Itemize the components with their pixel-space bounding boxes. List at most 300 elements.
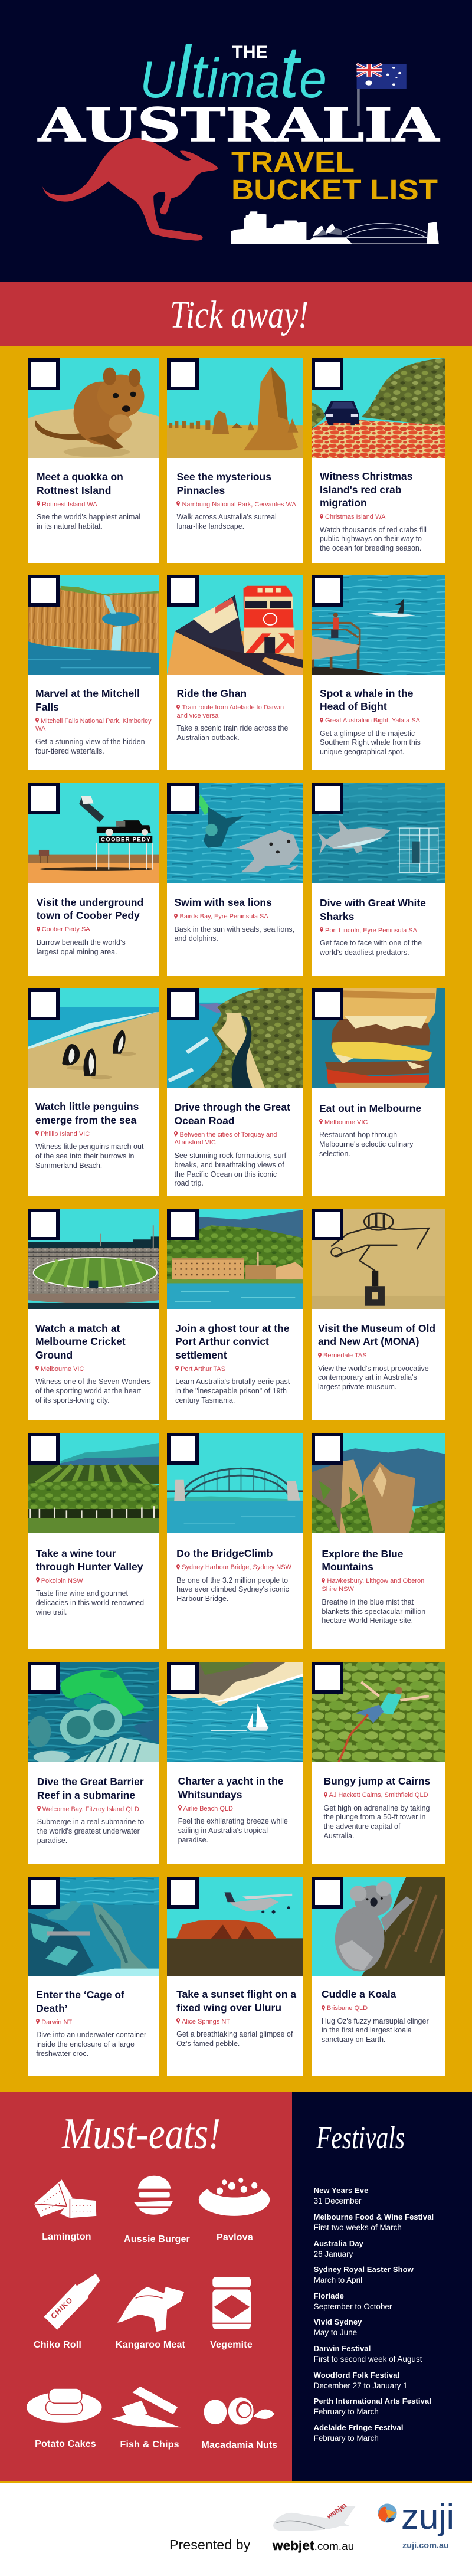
festival: darwin festival (314, 2343, 422, 2365)
festival: vivid sydney: May to June (314, 2328, 357, 2337)
text: the ghan: Train route from Adelaide to Darwin (182, 704, 284, 711)
text: red crab migration (320, 470, 427, 552)
heading: festivals: Festivals (316, 2120, 405, 2155)
label: lamington: Lamington (42, 2232, 91, 2242)
scene: ghan train (167, 575, 303, 675)
text: webjet url: webjet.com.au (273, 2538, 354, 2553)
text: great barrier reef: Submerge in a real submarine to (37, 1818, 144, 1826)
festival: perth international arts festival: Perth International Arts Festival (314, 2397, 431, 2405)
festival: vivid sydney: Vivid Sydney (314, 2318, 362, 2326)
text: cage of death (36, 1988, 146, 2059)
scene: submarine and coral (28, 1662, 159, 1762)
text: melbourne eats: Restaurant-hop through (319, 1131, 397, 1139)
text: cage of death: Enter the ‘Cage of (36, 1989, 124, 2001)
text: mitchell falls (35, 688, 152, 755)
checkbox (312, 575, 343, 607)
icon: vegemite jar (212, 2277, 251, 2329)
text: bungy (323, 1775, 430, 1841)
festival: darwin festival: First to second week of August (314, 2355, 422, 2364)
icon: chiko roll: CHIKO (49, 2295, 74, 2320)
checkbox (27, 1209, 59, 1240)
card: bungy (312, 1662, 445, 1864)
text: hunter valley: Taste fine wine and gourmet (36, 1589, 128, 1598)
text: mitchell falls: Get a stunning view of the hidden (35, 738, 145, 746)
text: uluru: Oz's famed pebble. (176, 2040, 240, 2048)
checkbox (27, 1877, 59, 1909)
text: blue mountains: Breathe in the blue mist that (322, 1598, 414, 1606)
text: quokka (37, 471, 140, 531)
text: pinnacles: lunar-like landscape. (176, 522, 244, 531)
scene: shark and cage (312, 783, 445, 883)
card: great barrier reef (27, 1662, 159, 1864)
text: the ghan: and vice versa (176, 712, 218, 719)
text: mitchell falls: four-tiered waterfalls. (35, 747, 104, 755)
scene: little penguins (28, 988, 159, 1088)
text: mcg: Melbourne VIC (41, 1366, 84, 1373)
text: sea lions: Bairds Bay, Eyre Peninsula SA (179, 913, 268, 920)
text: bungy: Get high on adrenaline by taking (323, 1804, 430, 1812)
text: port arthur: settlement (175, 1349, 227, 1361)
festival: darwin festival: Darwin Festival (314, 2344, 371, 2353)
panel: must-eats (0, 2092, 292, 2481)
text: red crab migration: public highways on their way to (320, 535, 422, 543)
text: bridgeclimb: Sydney Harbour Bridge, Sydney NSW (182, 1564, 291, 1571)
scene: cricket ground (28, 1209, 159, 1309)
scene: crab road (312, 358, 445, 458)
card: mcg (27, 1209, 159, 1420)
text: red crab migration: migration (320, 497, 367, 509)
card: penguins (27, 988, 159, 1196)
text: sea lions: Swim with sea lions (174, 896, 272, 908)
checkbox (27, 783, 59, 814)
text: red crab migration: Christmas Island WA (325, 513, 385, 521)
text: red crab migration: the ocean for breeding season. (320, 544, 421, 552)
card: mona (312, 1209, 445, 1420)
heading: tick away: Tick away! (170, 293, 309, 336)
festival: new years eve: New Years Eve (314, 2186, 368, 2195)
text: pinnacles: See the mysterious (176, 471, 271, 483)
checkbox (167, 358, 199, 390)
card: coober pedy (27, 783, 159, 976)
icon: macadamia nuts (204, 2397, 274, 2425)
text: koala: in the first and largest koala (322, 2026, 412, 2034)
text: bungy: Bungy jump at Cairns (323, 1775, 430, 1787)
text: cage of death: inside the enclosure of a large (36, 2040, 135, 2048)
text: quokka: in its natural habitat. (37, 522, 103, 531)
text: uluru: fixed wing over Uluru (176, 2002, 281, 2014)
text: uluru: Alice Springs NT (182, 2018, 230, 2025)
text: great white sharks: world's deadliest predators. (320, 948, 409, 957)
heading: must-eats: Must-eats! (61, 2110, 221, 2158)
text: zuji url: zuji.com.au (402, 2541, 449, 2551)
text: bridgeclimb: have ever climbed Sydney's iconic (176, 1585, 289, 1593)
checkbox (312, 783, 343, 814)
checkbox (312, 358, 343, 390)
text: blue mountains: Explore the Blue (322, 1548, 403, 1560)
festival: melbourne food and wine (314, 2212, 434, 2233)
label: macadamia nuts: Macadamia Nuts (201, 2440, 278, 2450)
festival: vivid sydney (314, 2317, 362, 2338)
text: blue mountains: Shire NSW (322, 1586, 354, 1593)
scene: pinnacles (167, 358, 303, 458)
text: great white sharks (320, 897, 426, 957)
icon: fish and chips (112, 2387, 181, 2427)
text: melbourne eats (319, 1102, 421, 1158)
text: cage of death: Death’ (36, 2002, 68, 2014)
text: coober pedy: town of Coober Pedy (37, 909, 140, 921)
text: mona: contemporary art in Australia's (318, 1373, 417, 1382)
card: sea lions (167, 783, 303, 976)
card: cage of death (27, 1877, 159, 2076)
label: potato cakes: Potato Cakes (35, 2438, 96, 2449)
scene: crocodile cage (27, 1877, 159, 1976)
text: hunter valley: Pokolbin NSW (41, 1577, 83, 1585)
text: great ocean road: road trip. (174, 1179, 204, 1187)
checkbox (167, 575, 199, 607)
festival: sydney royal easter show: Sydney Royal Easter Show (314, 2265, 414, 2274)
text: coober pedy: Coober Pedy SA (42, 926, 90, 933)
text: red crab migration: Watch thousands of red crabs fill (320, 526, 427, 534)
icon: red kangaroo (42, 138, 218, 241)
festival: adelaide fringe festival (314, 2423, 404, 2444)
text: pinnacles: Pinnacles (176, 484, 225, 496)
text: hunter valley: Take a wine tour (36, 1547, 116, 1559)
icon: potato cakes (27, 2388, 101, 2423)
text: blue mountains: Mountains (322, 1561, 373, 1573)
text: penguins: Phillip Island VIC (41, 1131, 90, 1138)
card: uluru (167, 1877, 303, 2076)
festival: floriade: Floriade (314, 2292, 344, 2300)
text: bridgeclimb: Harbour Bridge. (176, 1595, 228, 1603)
title: the ultimate australia travel bucket list (37, 31, 440, 206)
text: port arthur: Join a ghost tour at the (175, 1322, 290, 1334)
panel: header (0, 0, 472, 282)
text: mcg (35, 1322, 151, 1405)
title: the ultimate australia travel bucket list: TRAVEL (231, 147, 355, 178)
card: great white sharks (312, 783, 445, 976)
text: melbourne eats: Eat out in Melbourne (319, 1102, 421, 1114)
text: presented by: Presented by (169, 2537, 250, 2552)
text: whitsundays: paradise. (178, 1836, 208, 1844)
scene: port arthur ruins (167, 1209, 303, 1309)
checkbox (167, 1433, 199, 1465)
card: pinnacles (167, 358, 303, 563)
festival: floriade: September to October (314, 2302, 392, 2311)
text: koala: sanctuary on Earth. (322, 2035, 385, 2044)
text: great ocean road (174, 1101, 290, 1187)
card: hunter valley (27, 1433, 159, 1649)
text: whale (320, 687, 421, 756)
text: great barrier reef (37, 1775, 144, 1846)
festival: sydney royal easter show: March to April (314, 2276, 362, 2284)
text: whale: Spot a whale in the (320, 687, 413, 699)
text: whitsundays: Whitsundays (178, 1788, 242, 1800)
text: mcg: Witness one of the Seven Wonders (35, 1377, 151, 1386)
text: bungy: AJ Hackett Cairns, Smithfield QLD (329, 1792, 428, 1799)
text: great white sharks: Dive with Great White (320, 897, 426, 909)
title: the ultimate australia travel bucket list: AUSTRALIA (38, 99, 440, 152)
scene: coober pedy sign (28, 783, 159, 883)
scene: mona sculpture (312, 1209, 445, 1309)
text: mona (318, 1322, 435, 1391)
card: the ghan (167, 575, 303, 770)
festival: australia day: 26 January (314, 2250, 353, 2258)
festival: australia day (314, 2238, 363, 2260)
festival: melbourne food and wine: First two weeks of March (314, 2223, 402, 2232)
text: great ocean road: Between the cities of Torquay and (179, 1131, 277, 1138)
text: whitsundays: sailing in Australia's tropical (178, 1827, 268, 1835)
text: great white sharks: Sharks (320, 910, 354, 922)
text: mitchell falls: Falls (35, 701, 59, 713)
text: hunter valley: wine trail. (36, 1608, 67, 1616)
text: uluru (176, 1988, 296, 2049)
scene: waterfall (28, 575, 159, 675)
scene: three sisters (312, 1433, 445, 1533)
text: quokka: See the world's happiest animal (37, 513, 140, 521)
panel: festivals (292, 2092, 472, 2481)
text: great white sharks: Get face to face with one of the (320, 939, 422, 947)
text: great ocean road: Allansford VIC (174, 1139, 216, 1146)
text: bungy: the adventure capital of (323, 1822, 400, 1831)
title: the ultimate australia travel bucket list: Ultimate (140, 31, 327, 113)
text: melbourne eats: Melbourne VIC (324, 1119, 368, 1126)
text: pinnacles: Walk across Australia's surreal (176, 513, 277, 521)
checkbox (27, 988, 59, 1020)
text: mcg: Melbourne Cricket (35, 1336, 126, 1347)
checkbox (27, 575, 59, 607)
text: cage of death: freshwater croc. (36, 2050, 88, 2058)
label: pavlova: Pavlova (217, 2233, 253, 2243)
text: great ocean road: the Pacific Ocean on this iconic (174, 1170, 277, 1179)
food icons (0, 2092, 292, 2481)
text: whale: Great Australian Bight, Yalata SA (325, 717, 420, 724)
text: penguins (35, 1101, 144, 1170)
text: port arthur: Port Arthur convict (175, 1336, 269, 1347)
icon: aussie burger (134, 2176, 173, 2215)
text: great ocean road: Drive through the Great (174, 1101, 290, 1113)
text: blue mountains (322, 1548, 428, 1625)
scene: coastal road (167, 988, 303, 1088)
text: hunter valley: delicacies in this world-renowned (36, 1599, 144, 1607)
icon: chiko roll (44, 2274, 100, 2330)
scene: quokka (28, 358, 159, 458)
checkbox (312, 1209, 343, 1240)
text: penguins: of the sea into their burrows in (35, 1152, 134, 1160)
text: mitchell falls: WA (35, 725, 45, 732)
text: uluru: Take a sunset flight on a (176, 1988, 296, 2000)
label: kangaroo meat: Kangaroo Meat (116, 2340, 185, 2350)
festival: new years eve: 31 December (314, 2197, 362, 2205)
text: red crab migration: Island's red crab (320, 484, 401, 496)
text: whale: unique geographical spot. (320, 748, 404, 756)
text: whale: Southern Right whale from this (320, 738, 421, 747)
text: melbourne eats: Melbourne's eclectic culinary (319, 1140, 413, 1148)
illustration: kangaroo, flag and skyline (42, 63, 439, 244)
panel: tick away banner (0, 282, 472, 346)
text: bridgeclimb: Do the BridgeClimb (176, 1547, 273, 1559)
scene: koala on tree (312, 1877, 445, 1976)
festival: new years eve (314, 2185, 368, 2207)
text: penguins: Summerland Beach. (35, 1161, 102, 1170)
card: bridgeclimb (167, 1433, 303, 1649)
text: port arthur: Port Arthur TAS (181, 1366, 225, 1373)
text: great barrier reef: Reef in a submarine (37, 1789, 135, 1801)
checkbox (27, 358, 59, 390)
text: whale: Head of Bight (320, 701, 387, 712)
panel: footer (0, 2483, 472, 2576)
scene: giant burger (312, 988, 445, 1088)
festival: perth international arts festival (314, 2396, 431, 2417)
text: quokka: Meet a quokka on (37, 471, 123, 483)
text: the ghan: Australian outback. (176, 734, 240, 742)
text: koala: Hug Oz's fuzzy marsupial clinger (322, 2017, 429, 2025)
text: the ghan (176, 688, 288, 742)
text: sea lions: Bask in the sun with seals, sea lions, (174, 925, 294, 934)
text: koala: Cuddle a Koala (322, 1988, 396, 2000)
icon: australian flag on pole (357, 64, 407, 126)
text: pinnacles (176, 471, 296, 531)
text: sea lions: and dolphins. (174, 934, 218, 942)
text: great barrier reef: the world's greatest underwater (37, 1827, 140, 1835)
festival: woodford folk festival (314, 2370, 408, 2391)
festival: australia day: Australia Day (314, 2239, 363, 2248)
text: mitchell falls: Marvel at the Mitchell (35, 688, 140, 699)
text: great barrier reef: paradise. (37, 1837, 67, 1845)
festival: woodford folk festival: December 27 to January 1 (314, 2381, 408, 2390)
text: cage of death: Dive into an underwater container (36, 2031, 146, 2039)
scene: coober pedy sign: COOBER PEDY (101, 836, 150, 843)
text: port arthur: in the "inescapable prison" of 19th (175, 1387, 287, 1395)
festival: perth international arts festival: February to March (314, 2407, 379, 2416)
text: uluru: Get a breathtaking aerial glimpse of (176, 2030, 293, 2038)
text: coober pedy: Burrow beneath the world's (37, 938, 126, 947)
text: whitsundays: Airlie Beach QLD (183, 1805, 233, 1812)
text: port arthur (175, 1322, 290, 1405)
checkbox (167, 1662, 199, 1694)
text: sea lions (174, 896, 294, 942)
card: great ocean road (167, 988, 303, 1196)
text: blue mountains: blankets this spectacular million- (322, 1608, 428, 1616)
title: the ultimate australia travel bucket list: THE (232, 42, 268, 62)
text: koala (322, 1988, 429, 2045)
text: bridgeclimb: Be one of the 3.2 million people to (176, 1576, 288, 1585)
checkbox (27, 1662, 59, 1694)
text: mcg: of the sporting world at the heart (35, 1387, 141, 1395)
text: whitsundays (178, 1775, 288, 1845)
text: bungy: Australia. (323, 1832, 355, 1840)
text: penguins: Witness little penguins march out (35, 1143, 143, 1151)
icon: zuji globe (378, 2503, 397, 2523)
text: coober pedy: Visit the underground (37, 896, 143, 908)
card: melbourne eats (312, 988, 445, 1196)
text: mona: View the world's most provocative (318, 1364, 429, 1373)
icon: kangaroo meat (117, 2287, 184, 2332)
text: whitsundays: Feel the exhilarating breeze while (178, 1817, 288, 1825)
card: port arthur (167, 1209, 303, 1420)
text: mitchell falls: Mitchell Falls National Park, Kimberley (41, 718, 152, 725)
text: melbourne eats: selection. (319, 1150, 350, 1158)
icon: lamington (34, 2179, 96, 2218)
scene: uluru flight (167, 1877, 303, 1976)
label: vegemite: Vegemite (210, 2340, 253, 2350)
checkbox (312, 988, 343, 1020)
festival: sydney royal easter show (314, 2264, 414, 2286)
text: great ocean road: See stunning rock formations, surf (174, 1151, 286, 1160)
text: mcg: Watch a match at (35, 1322, 120, 1334)
checkbox (167, 1209, 199, 1240)
text: cage of death: Darwin NT (41, 2019, 72, 2026)
checkbox (312, 1433, 343, 1465)
text: great barrier reef: Welcome Bay, Fitzroy Island QLD (42, 1806, 139, 1813)
icon: Sydney skyline (231, 211, 439, 244)
checkbox (167, 783, 199, 814)
text: port arthur: Learn Australia's brutally eerie past (175, 1377, 290, 1386)
text: hunter valley: through Hunter Valley (36, 1560, 143, 1572)
festival: adelaide fringe festival: Adelaide Fringe Festival (314, 2423, 404, 2432)
scene: sydney harbour bridge (167, 1433, 303, 1533)
scene: vineyards (28, 1433, 159, 1533)
text: red crab migration: Witness Christmas (320, 470, 412, 482)
title: the ultimate australia travel bucket list: BUCKET LIST (231, 175, 438, 206)
label: aussie burger: Aussie Burger (124, 2234, 190, 2244)
scene: yacht (167, 1662, 303, 1762)
text: the ghan: Take a scenic train ride across the (176, 724, 288, 732)
text: port arthur: century Tasmania. (175, 1396, 235, 1405)
text: hunter valley (35, 1547, 144, 1616)
text: great white sharks: Port Lincoln, Eyre Peninsula SA (325, 927, 417, 934)
text: mona: Visit the Museum of Old (318, 1322, 435, 1334)
text: bridgeclimb (176, 1547, 291, 1603)
card: koala (312, 1877, 445, 2076)
icon: pavlova (199, 2178, 270, 2216)
text: pinnacles: Nambung National Park, Cervantes WA (182, 501, 296, 508)
text: quokka: Rottnest Island WA (42, 501, 97, 508)
text: penguins: emerge from the sea (35, 1114, 136, 1126)
scene: bungy jumper (312, 1662, 445, 1762)
card: whale (312, 575, 445, 770)
text: blue mountains: hectare World Heritage site. (322, 1616, 413, 1625)
card: red crab migration (312, 358, 445, 563)
checkbox (167, 1877, 199, 1909)
text: mcg: of its sports-loving city. (35, 1396, 110, 1405)
text: bungy: the plunge from a 50-ft tower in (323, 1813, 426, 1821)
text: mona: largest private museum. (318, 1383, 396, 1391)
text: blue mountains: Hawkesbury, Lithgow and Oberon (327, 1577, 424, 1585)
card: whitsundays (167, 1662, 303, 1864)
text: coober pedy: largest opal mining area. (37, 948, 117, 956)
card: mitchell falls (27, 575, 159, 770)
text: great ocean road: breaks, and breathtaking views of (174, 1161, 284, 1169)
text: mona: and New Art (MONA) (318, 1336, 419, 1347)
scene: swimmer and sea lion (167, 783, 303, 883)
text: great barrier reef: Dive the Great Barrier (37, 1776, 144, 1788)
scene: whale lookout (312, 575, 445, 675)
text: whitsundays: Charter a yacht in the (178, 1775, 284, 1787)
festival: melbourne food and wine: Melbourne Food & Wine Festival (314, 2212, 434, 2221)
card: quokka (27, 358, 159, 563)
checkbox (27, 1433, 59, 1465)
text: the ghan: Ride the Ghan (176, 688, 247, 699)
festival: adelaide fringe festival: February to March (314, 2434, 379, 2443)
text: penguins: Watch little penguins (35, 1101, 139, 1112)
label: chiko roll: Chiko Roll (34, 2340, 81, 2350)
festival: woodford folk festival: Woodford Folk Festival (314, 2371, 399, 2379)
text: great ocean road: Ocean Road (174, 1114, 235, 1126)
text: whale: Get a glimpse of the majestic (320, 729, 415, 738)
label: fish and chips: Fish & Chips (120, 2440, 179, 2450)
text: mona: Berriedale TAS (323, 1352, 367, 1359)
text: koala: Brisbane QLD (327, 2005, 368, 2012)
